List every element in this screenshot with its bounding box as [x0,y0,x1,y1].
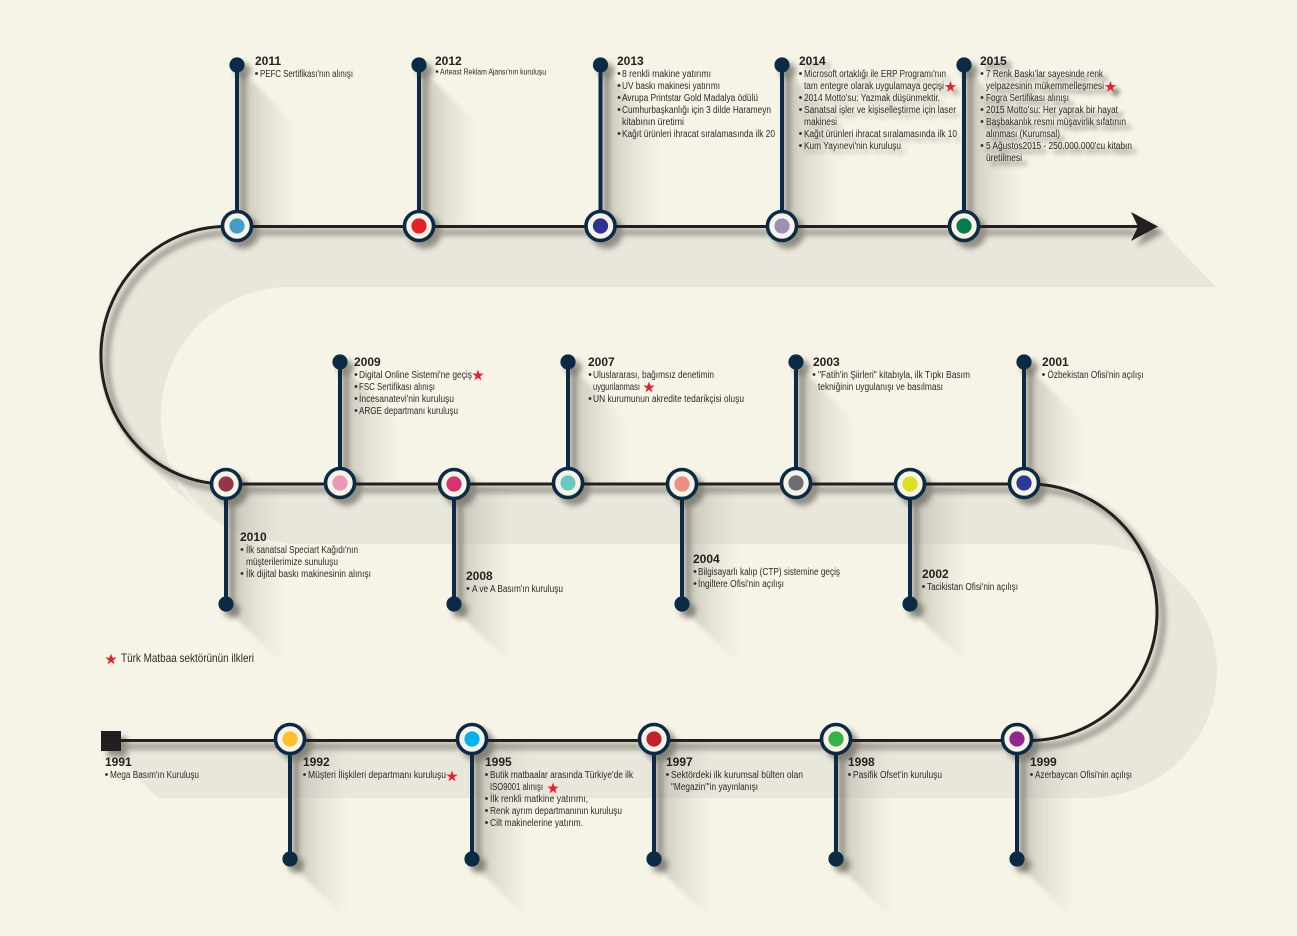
milestone 2010: 2010 [240,530,267,544]
milestone 2013: UV baskı makinesi yatırımı [622,81,720,92]
milestone 1995: İlk renkli matkine yatırımı, [490,792,588,805]
milestone 2007 [554,354,744,498]
milestone 1997: 1997 [666,755,693,769]
milestone 2009: FSC Sertifikası alınışı [359,382,435,393]
milestone 2009: 2009 [354,355,381,369]
milestone 2014: makinesi [804,117,837,128]
milestone 2015: yelpazesinin mükemmelleşmesi [986,81,1104,92]
milestone 2002: 2002 [922,567,949,581]
milestone 2011: PEFC Sertifikası'nın alınışı [260,69,353,80]
timeline arrowhead [1131,212,1158,241]
milestone 1992: 1992 [303,755,330,769]
milestone 2013: Kağıt ürünleri ihracat sıralamasında ilk 20 [622,129,775,140]
milestone 2004: Bilgisayarlı kalıp (CTP) sistemine geçiş [698,567,840,578]
milestone 2001: 2001 [1042,355,1069,369]
legend: star meaning: Türk Matbaa sektörünün ilkleri [121,651,254,665]
milestone 1999: Azerbaycan Ofisi'nin açılışı [1035,770,1132,781]
milestone 2009: İncesanatevi'nin kuruluşu [359,392,454,405]
milestone 2015: 7 Renk Baskı'lar sayesinde renk [986,69,1104,80]
blurred drop shadows of line, stems and nodes [107,63,1164,873]
milestone 2015: Fogra Sertifikası alınışı [986,93,1069,104]
milestone 2003: tekniğinin uygulanışı ve basılması [818,382,943,393]
milestone 2012: Arteast Reklam Ajansı'nın kuruluşu [440,66,546,76]
milestone 2010: İlk dijital baskı makinesinin alınışı [246,567,371,580]
milestone 2013: 2013 [617,54,644,68]
milestone 1995: Cilt makinelerine yatırım. [490,818,583,829]
milestone 2003: "Fatih'in Şiirleri" kitabıyla, ilk Tıpkı Basım [818,370,970,381]
milestone 2012 [404,54,546,240]
milestone 1995: ISO9001 alınışı [490,782,543,793]
milestone 1992: Müşteri İlişkileri departmanı kuruluşu [308,768,446,781]
milestone 2014: tam entegre olarak uygulamaya geçişi [804,81,944,92]
serpentine timeline line [101,226,1157,740]
milestone 1998 [822,724,942,867]
milestone 2013: Cumhurbaşkanlığı için 3 dilde Harameyn [622,105,771,116]
milestone 1999: 1999 [1030,755,1057,769]
milestone 2007: 2007 [588,355,615,369]
milestone 2007: UN kurumunun akredite tedarikçisi oluşu [593,394,744,405]
milestone 2010: müşterilerimize sunuluşu [246,557,338,568]
milestone 2013: kitabının üretimi [622,117,684,128]
cast shadows of stems [228,68,1084,921]
milestone 2007: Uluslararası, bağımsız denetimin [593,370,714,381]
milestone 1991: 1991 [105,755,132,769]
milestone 1995: Butik matbaalar arasında Türkiye'de ilk [490,770,634,781]
milestone 1992 [276,724,458,867]
milestone 2014: Kağıt ürünleri ihracat sıralamasında ilk 10 [804,129,957,140]
milestone 2013: 8 renkli makine yatırımı [622,69,711,80]
milestone 2004: 2004 [693,552,720,566]
milestone 1999 [1002,724,1132,867]
milestone 1997: "Megazin"'in yayınlanışı [671,782,758,793]
milestone 2014: Sanatsal işler ve kişiselleştirme için laser [804,105,957,116]
milestone 2008 [440,470,563,612]
milestone 1995: 1995 [485,755,512,769]
milestone 2015: Başbakanlık resmi müşavirlik sıfatının [986,117,1126,128]
milestone 2012: 2012 [435,54,462,68]
milestone 2002: Tacikistan Ofisi'nin açılışı [927,582,1018,593]
milestone 1998: 1998 [848,755,875,769]
milestone 2009: ARGE departmanı kuruluşu [359,406,458,417]
milestone 2013 [586,54,775,240]
milestone 2014: Microsoft ortaklığı ile ERP Programı'nın [804,69,946,80]
milestone 1997 [640,724,803,867]
milestone 1995: Renk ayrım departmanının kuruluşu [490,806,622,817]
milestone 2003: 2003 [813,355,840,369]
milestone 2014: 2014 [799,54,826,68]
milestone 1991 [105,755,199,781]
milestone 2008: A ve A Basım'ın kuruluşu [472,584,563,595]
milestone 2004 [668,470,840,612]
milestone 2009: Digital Online Sistemi'ne geçiş [359,370,472,381]
milestone 2014: Kum Yayınevi'nin kuruluşu [804,141,901,152]
start square 1991 [101,731,121,751]
milestone 2003 [782,354,970,498]
extruded shadow band behind timeline [99,226,1217,798]
milestone 2010 [212,470,371,612]
milestone 2015: 5 Ağustos2015 - 250.000.000'cu kitabın [986,141,1132,152]
milestone 2015: 2015 Motto'su: Her yaprak bir hayat [986,105,1118,116]
milestone 2015: alınması (Kurumsal) [986,129,1060,140]
milestone 2015: 2015 [980,54,1007,68]
milestone 1991: Mega Basım'ın Kuruluşu [110,770,199,781]
milestone 2011 [222,54,353,240]
milestone 2015 [950,54,1132,240]
milestone 1997: Sektördeki ilk kurumsal bülten olan [671,770,803,781]
milestone 2002 [896,470,1018,612]
milestone 2015: üretilmesi [986,153,1022,164]
milestone 2004: İngiltere Ofisi'nin açılışı [698,577,784,590]
milestone 2010: İlk sanatsal Speciart Kağıdı'nın [246,543,358,556]
milestone 1998: Pasifik Ofset'in kuruluşu [853,770,942,781]
milestone 1995 [458,724,634,867]
milestone 2001 [1010,354,1144,498]
milestone 2014 [768,54,957,240]
milestone 2013: Avrupa Printstar Gold Madalya ödülü [622,93,758,104]
milestone 2014: 2014 Motto'su: Yazmak düşünmektir. [804,93,940,104]
milestone 2001: Özbekistan Ofisi'nin açılışı [1048,369,1144,381]
milestone 2011: 2011 [255,54,281,68]
milestone 2007: uygunlanması [593,382,640,393]
milestone 2009 [326,354,484,498]
milestone 2008: 2008 [466,569,493,583]
